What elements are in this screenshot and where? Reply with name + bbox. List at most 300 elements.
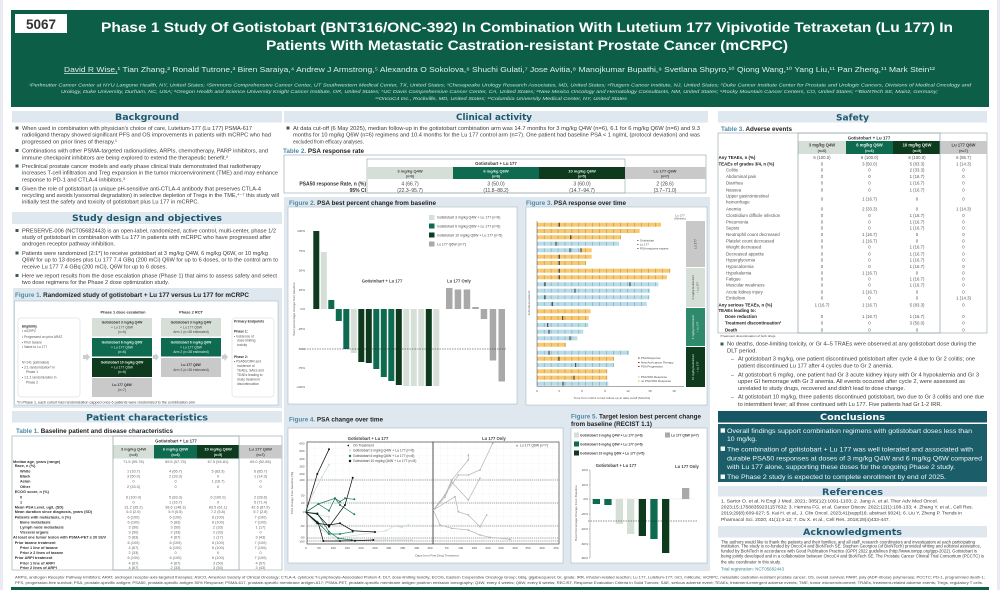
table 1 baseline characteristics (12, 436, 282, 570)
table 3 adverse events: 0 (962, 321, 965, 326)
table 2 PSA response: Lu 177 Q6W (654, 168, 677, 174)
figure 5 legend: Gotistobart 6 mg/kg Q6W + Lu 177 (n=6) (580, 442, 643, 446)
table 3 adverse events: 3 (50.0) (910, 321, 925, 326)
figure 3 legend: treatments: Lu 177 (640, 242, 649, 246)
table 3 adverse events: 0 (962, 226, 965, 231)
table 1 baseline characteristics: 0 (174, 551, 177, 555)
table 3 adverse events: 6 (100.0) (813, 155, 831, 160)
figure 4 axes: PSA change from baseline (%) (290, 472, 294, 514)
figure 4 axes: 200 (299, 472, 305, 476)
heading: clinical activity: Clinical activity (456, 113, 532, 123)
table 1 baseline characteristics: Prior ≥ 2 lines of taxane (20, 551, 63, 555)
figure 3 axes: 12 (626, 389, 630, 393)
table 3 adverse events: Diarrhea (726, 180, 743, 185)
table 3 adverse events: 0 (962, 174, 965, 179)
affiliations: Urology, Duke University, Durham, NC, USA; ⁶Oregon Health and Science University Knight Cancer Institute, OR, United States; ⁷UC Davis Comprehensive Cancer Center, CA, United States; ⁸New Mexico Oncology and Hematology Consultants, NM, United States; ⁹Rocky Mountain Cancer Centers, CO, United States; ¹⁰BioNTech SE, Mainz, Germany; (61, 89, 939, 94)
figure 4 axes: 400 (299, 457, 305, 461)
figure 3 cohort bands: + Lu 177 (696, 361, 700, 372)
heading: background: Background (115, 113, 179, 123)
table 1 baseline characteristics: 67.5 (54-81) (208, 460, 229, 464)
table 3 adverse events: Platelet count decreased (726, 238, 775, 243)
table 3 adverse events: Death (725, 327, 738, 332)
safety bullets: – (731, 373, 734, 379)
table 1 baseline characteristics: (n=5) (214, 453, 222, 457)
clinical activity text: excluded from efficacy analyses. (293, 139, 364, 145)
table 1 baseline characteristics: 2 (33) (171, 566, 181, 570)
table 1 baseline characteristics: 3 (50) (171, 526, 181, 530)
table 1 baseline characteristics: 2 (33.3) (169, 475, 183, 479)
phase 1 dose escalation column (92, 310, 152, 397)
figure 5 axes: -20% (581, 512, 588, 516)
figure 4 axes: 20 (301, 501, 305, 505)
table 1 baseline characteristics: (n=7) (256, 453, 265, 457)
figure 4 spider lines: 10 mg/kg (306, 449, 375, 541)
figure 2 y axis: Best percentage change from baseline (292, 282, 296, 335)
table 3 adverse events: Any TEAEs, n (%) (718, 155, 756, 160)
table 3 adverse events: 0 (821, 162, 824, 167)
figure 2 title: Figure 2. PSA best percent change from baseline (289, 200, 436, 207)
table 3 adverse events: 1 (16.7) (910, 264, 925, 269)
figure 4 axes: 450 (427, 546, 433, 550)
table 1 baseline characteristics: 5 (83.3) (169, 495, 183, 499)
table 3 adverse events: 1 (16.7) (862, 302, 877, 307)
table 3 adverse events: 1 (16.7) (862, 290, 877, 295)
figure 5 group labels: Gotistobart + Lu 177 (596, 463, 637, 468)
table 3 adverse events: 0 (962, 245, 965, 250)
table 1 baseline characteristics: 3 (50) (129, 531, 139, 535)
figure 4 legend: On Treatment (353, 444, 374, 448)
table 3 adverse events: 3 mg/kg Q4W (809, 142, 835, 148)
eligibility box: • Naive to Lu 177 (22, 345, 47, 349)
header banner (11, 10, 989, 107)
table 3 adverse events: 1 (16.7) (862, 197, 877, 202)
background bullets: Combinations with other PSMA-targeted radionuclides, ARPIs, chemotherapy, PARP inhibitors, and (22, 148, 268, 154)
figure 4 axes: 100 (458, 546, 464, 550)
eligibility box: • 2:1 randomization* in (22, 366, 55, 370)
table 3 adverse events: TEAEs of grades 3/4, n (%) (718, 162, 775, 167)
background bullets: Given the role of gotistobart (a unique pH-sensitive anti-CTLA-4 antibody that preserves CTLA-4 (22, 186, 261, 192)
background bullets: Preclinical prostate cancer models and early phase clinical trials demonstrated that radiotherapy (22, 164, 261, 170)
table 1 baseline characteristics: 1 (17) (213, 536, 224, 540)
figure 3 axes: 3 (558, 389, 560, 393)
figure 2 y axis: 50% (299, 268, 305, 272)
figure 4 axes: 50 (445, 546, 449, 550)
table 2 PSA response: PSA50 response Rate, n (%) (299, 181, 366, 187)
phase 1 dose escalation column: + Lu 177 Q6W (111, 346, 134, 350)
table 3 adverse events: 1 (16.7) (910, 251, 925, 256)
table 1 baseline characteristics: 4 (67) (171, 561, 181, 565)
conclusions text: The Phase 2 study is expected to complete enrollment by end of 2025. (727, 474, 946, 481)
safety bullets: upper GI hemorrage with Gr 3 anemia. All events occurred after cycle 2, were assessed as (738, 379, 965, 385)
primary endpoints box: toxicity (237, 343, 247, 347)
phase 2 RCT column: Gotistobart 6 mg/kg Q6W (171, 340, 212, 344)
table 1 baseline characteristics: (n=6) (171, 453, 180, 457)
figure 3 axes: 18 (672, 389, 676, 393)
figure 5 target lesion best percent change: from baseline (RECIST 1.1) (571, 421, 652, 428)
figure 4 spider lines: Lu 177 (433, 443, 510, 539)
eligibility box (18, 318, 80, 397)
table 3 adverse events: 0 (868, 213, 871, 218)
table 3 footnote: ¹Treatment discontinuation of both drugs (720, 334, 776, 338)
figure 5 axes: 20% (582, 483, 588, 487)
table 3 adverse events: Hyperglycemia (726, 258, 756, 263)
table 1 baseline characteristics: 6 (100) (169, 556, 182, 560)
figure 3 cohort bands: + Lu 177 (696, 321, 700, 332)
figure 4 axes: 200 (358, 546, 364, 550)
table 1 baseline characteristics: 5 (71.4) (254, 500, 268, 504)
figure 2 legend: Gotistobart 10 mg/kg Q6W + Lu 177 (n=5) (437, 234, 502, 238)
table 3 adverse events: 0 (962, 290, 965, 295)
table 3 adverse events: 0 (962, 314, 965, 319)
primary endpoints box: TEAEs, SAEs and (237, 369, 264, 373)
table 3 adverse events: 0 (868, 283, 871, 288)
table 3 adverse events: 0 (962, 270, 965, 275)
safety bullets: At gotistobart 6 mg/kg, one patient had Gr 3 acute kidney injury with Gr 4 hypokalemia and Gr 3 (738, 373, 979, 379)
table 1 baseline characteristics: 0 (217, 475, 219, 479)
panel: conclusions (718, 411, 987, 482)
table 3 adverse events: 0 (868, 295, 871, 300)
figure 3 axes: 0 (536, 389, 538, 393)
phase 1 dose escalation column: Gotistobart 3 mg/kg Q4W (102, 320, 143, 324)
figure 2 legend: Lu 177 Q6W (n=7) (437, 242, 466, 246)
table 1 baseline characteristics: 2 (33) (213, 526, 224, 530)
arrow: eligibility to phase 1 (83, 353, 90, 361)
figure 4 axes: 250 (372, 546, 378, 550)
phase 2 RCT column: Arm 3 (n=38 estimated) (173, 368, 209, 372)
table 1 baseline characteristics: 6 (100) (127, 556, 140, 560)
table 3 adverse events: 0 (821, 174, 824, 179)
heading: conclusions (718, 411, 987, 423)
title: Phase 1 Study Of Gotistobart (BNT316/ONC-392) In Combination With Lutetium 177 Vipivotide Tetraxetan (Lu 177) In (101, 20, 953, 36)
figure 3 cohort bands (686, 221, 705, 387)
safety bullets: – (731, 395, 734, 401)
table 3 adverse events: Embolism (726, 295, 746, 300)
figure 4 legend: Lu 177 Q6W (n=7) (520, 444, 548, 448)
figure 4 axes: 0 (305, 546, 307, 550)
table 1 baseline characteristics: 2 (33) (213, 531, 224, 535)
figure 4 spider lines: 3 mg/kg (306, 465, 412, 540)
table 1 baseline characteristics: 6 (100.0) (126, 495, 142, 499)
references text: 1. Sartor O. et al. N Engl J Med. 2021; 385(12):1091-1103; 2. Jang A. et al. Ther Adv Med Oncol. (721, 498, 938, 504)
figure 2 group labels: Gotistobart + Lu 177 (362, 278, 403, 284)
figure 3 cohort bands: + Lu 177 (696, 282, 700, 293)
figure 2 y axis (292, 229, 305, 389)
figure 5 group labels (596, 463, 700, 469)
figure 4 axes: 250 (498, 546, 504, 550)
table 1 baseline characteristics: 0 (259, 551, 262, 555)
figure 4 axes: 300 (386, 546, 392, 550)
arrow: phase 2 to endpoints (222, 353, 228, 361)
figure 4 legend: Gotistobart 10 mg/kg Q6W + Lu 177 (n=5) (353, 459, 416, 463)
clinical activity text (286, 126, 700, 145)
phase 2 RCT column (161, 310, 221, 377)
table 1 baseline characteristics: 7 (100) (254, 541, 267, 545)
figure 3 legend: events: PSA Progression (641, 364, 663, 368)
study design bullets: androgen receptor pathway inhibition. (22, 242, 115, 248)
table 3 adverse events: 0 (821, 220, 824, 225)
table 3 adverse events: 0 (868, 258, 871, 263)
table 1 baseline characteristics: 0 (259, 531, 262, 535)
table 3 adverse events: Gotistobart + Lu 177 (848, 136, 891, 140)
panel: references (718, 486, 987, 522)
clinical activity text: months for 10 mg/kg Q6W (n=6) regimens and 10.4 months for the Lu 177 control arm (n=7). One patient had baseline PSA < 1 ng/mL (protocol deviation) and was (293, 133, 700, 139)
figure 1 footnote: *In Phase 1, each cohort had randomization capped once 6 patients were randomized to the combination arm (17, 400, 195, 404)
figure 3 axes: 6 (581, 389, 583, 393)
safety bullets: to intermittent fever; all three continued with Lu 177. Five patients had Gr 1-2 IRR. (738, 402, 942, 408)
figure 4 axes: 50 (317, 546, 321, 550)
figure 4 spider lines: 6 mg/kg (306, 498, 354, 540)
figure 5 legend: Gotistobart 3 mg/kg Q4W + Lu 177 (n=6) (580, 433, 643, 437)
table 1 baseline characteristics: 0 (217, 551, 219, 555)
table 1 baseline characteristics: 6 (100.0) (210, 495, 226, 499)
panel: figure 1 study schema (13, 288, 282, 408)
phase 2 RCT column: Gotistobart 3 mg/kg Q4W (171, 320, 212, 324)
figure 4 axes: 300 (299, 465, 305, 469)
figure 5 legend: Lu 177 Q6W (n=7) (671, 433, 699, 437)
heading: clinical activity (284, 111, 708, 123)
table 1 baseline characteristics: 7 (100) (254, 546, 267, 550)
figure 2 y axis: 75% (299, 249, 305, 253)
panel: acknowledgments (718, 526, 987, 571)
table 3 adverse events: 6 mg/kg Q6W (856, 142, 883, 148)
figure 4 axes: -50 (300, 524, 305, 528)
table 3 adverse events: 1 (16.7) (910, 277, 925, 282)
study design bullets: Q6W for up to 13 doses plus Lu 177 7.4 GBq (200 mCi) Q6W for up to 6 doses, or to the control arm to (22, 258, 278, 264)
background bullets: response to PD-1 and CTLA-4 inhibitors.³ (22, 177, 125, 183)
table 1 baseline characteristics: 4 (57) (256, 561, 266, 565)
table 1 baseline characteristics: 1 (16.7) (169, 500, 183, 504)
primary endpoints box: TEAEs leading to (237, 373, 263, 377)
table 3 adverse events: 0 (962, 187, 965, 192)
table 3 adverse events: 0 (916, 197, 919, 202)
table 1 baseline characteristics: 42.6 (87.9) (251, 505, 270, 509)
figure 3 title: Figure 3. PSA response over time (526, 200, 626, 207)
figure 3 legend: events: no PSA 50% Response (641, 379, 671, 383)
table 3 adverse events: 1 (16.7) (862, 238, 877, 243)
study design bullets (16, 228, 278, 286)
table 3 adverse events: 6 (100.0) (861, 155, 879, 160)
table 1 baseline characteristics: Patients with metastasis, n (%) (15, 515, 72, 519)
table 1 baseline characteristics: 3 (43) (256, 536, 266, 540)
abbreviations footnote: ARPIs, androgen Receptor Pathway Inhibitors; ARAT, androgen receptor-axis-targeted therapies; ASCO, American Society of Clinical Oncology; CTLA-4, cytotoxic T-Lymphocyte-Associated Protein 4; DLT, dose-limiting toxicity; ECOG, Eastern Cooperative Oncology Group; GBq, gigabecquerel; Gr, grade; IRR, infusion-related reaction; Lu 177, Lutetium-177; mCi, millicurie; mCRPC, metastatic castration-resistant prostate cancer; OS, overall survival; PARP, poly (ADP-ribose) polymerase; PCCTC; PD-1, programmed death-1; (15, 574, 985, 579)
primary endpoints box: incidence of (237, 364, 255, 368)
table 1 baseline characteristics: 6 (100) (169, 546, 182, 550)
figure 2 y axis: -50% (298, 347, 305, 351)
conclusions text: durable PSA50 responses at doses of 3 mg/kg Q4W and 6 mg/kg Q6W compared (727, 455, 982, 462)
background bullets: immune checkpoint inhibitors are being explored to extend the therapeutic benefit.² (22, 155, 228, 161)
table 3 adverse events: Weight decreased (726, 245, 762, 250)
figure 4 group labels: Lu 177 Only (482, 436, 507, 441)
table 3 adverse events: 0 (962, 232, 965, 237)
figure 3 axes: 15 (648, 389, 652, 393)
table 3 adverse events (718, 133, 987, 333)
table 1 baseline characteristics: 6 (100) (169, 541, 182, 545)
table 1 baseline characteristics: 4 (67) (171, 536, 181, 540)
table 3 adverse events: 0 (916, 290, 919, 295)
table 1 baseline characteristics: 4 (67) (129, 561, 139, 565)
table 3 adverse events: Decreased appetite (726, 251, 765, 256)
figure 4 group labels (348, 436, 507, 441)
table 3 adverse events: 1 (16.7) (910, 213, 925, 218)
references text (721, 498, 973, 522)
study design bullets: Patients were randomized (2:1*) to receive gotistobart at 3 mg/kg Q4W, 6 mg/kg Q6W, or 10 mg/kg (22, 251, 268, 257)
background bullets: recycling and avoids lysosomal degradation) in selective depletion of Tregs in the TME,⁴⁻⁷ this study will (22, 193, 279, 199)
figure 4 legend: Gotistobart 3 mg/kg Q4W + Lu 177 (n=6) (353, 449, 414, 453)
table 2 PSA response: 6 mg/kg Q6W (483, 168, 509, 174)
table 3 adverse events: 0 (962, 238, 965, 243)
table 2 PSA response: (14.7–94.7) (569, 188, 595, 194)
table 3 adverse events: 0 (821, 187, 824, 192)
figure 5 axes: Best Percentage Change From Baseline (574, 485, 578, 541)
table 3 adverse events: 0 (962, 327, 965, 332)
figure 4 axes: 0 (303, 510, 305, 514)
phase 1 dose escalation column: Lu 177 Q6W (112, 383, 132, 387)
primary endpoints box: Phase 1: (234, 329, 248, 333)
table 3 adverse events: 2 (33.3) (910, 168, 925, 173)
table 2 PSA response: (n=7) (661, 174, 669, 178)
abbreviations footnote: PFS, progression-free survival; PSA, prostate-specific antigen; PSA50, prostate-specific antigen 50% Response; PSMA-617, prostate-specific membrane antigen-617; PSMA-PET, prostate-specific membrane antigen positron emission tomography; Q4W, every 4 weeks; Q6W, every 6 weeks; RECIST, Response Evaluation Criteria in Solid Tumors; SAE, serious adverse event; TEAEs, treatment-emergent adverse events; TME, tumor microenvironment; TRAEs, treatment-related adverse events; Tregs, regulatory T cells. (15, 580, 983, 585)
background bullets: initially test the safety and toxicity of gotistobart plus Lu 177 in mCRPC. (22, 199, 199, 205)
table 1 baseline characteristics: 31.2 (35.2) (124, 505, 143, 509)
table 3 adverse events: 0 (962, 213, 965, 218)
panel: safety (718, 111, 987, 408)
table 1 baseline characteristics: (n=6) (129, 453, 138, 457)
table 3 adverse events: 0 (868, 245, 871, 250)
table 1 baseline characteristics: 2 (33) (129, 551, 139, 555)
figure 3 cohort bands: 3 mg/kg Gotistobart (691, 275, 695, 300)
table 1 baseline characteristics: Black (20, 475, 31, 479)
table 3 adverse events: 1 (16.7) (910, 220, 925, 225)
table 1 baseline characteristics: Asian (20, 480, 31, 484)
poster number: 5067 (26, 17, 56, 32)
table 1 baseline characteristics: 7 (100) (254, 520, 267, 524)
table 1 baseline characteristics: 3 (50) (129, 526, 139, 530)
table 1 baseline characteristics: 10 mg/kg Q6W (204, 446, 232, 452)
table 2 PSA response: 95% CI (350, 188, 367, 194)
conclusions text: 10 mg/kg. (727, 436, 757, 443)
study design bullets: receive Lu 177 7.4 GBq (200 mCi), Q6W for up to 6 doses. (22, 264, 167, 270)
table 3 adverse events: 0 (821, 251, 824, 256)
background bullets: When used in combination with physician's choice of care, Lutetium-177 (Lu 177) PSMA-617 (22, 126, 252, 132)
table 3 adverse events: 0 (962, 197, 965, 202)
figure 5 target lesion best percent change (571, 414, 707, 563)
figure 4 legend (347, 444, 548, 463)
conclusions text: Overall findings support combination regimens with gotistobart doses less than (727, 428, 972, 435)
table 3 adverse events: 0 (868, 220, 871, 225)
table 3 adverse events: 1 (16.7) (910, 283, 925, 288)
table 2 PSA response: (n=6) (406, 174, 414, 178)
table 3 adverse events: 0 (868, 277, 871, 282)
table 1 baseline characteristics: 5 (83) (129, 536, 139, 540)
table 1 baseline characteristics: 3 (50.0) (127, 475, 141, 479)
table 3 adverse events: 0 (821, 180, 824, 185)
table 1 baseline characteristics: Prior 2 lines of ARPI (20, 566, 57, 570)
eligibility box: • mCRPC (22, 329, 37, 333)
table 1 baseline characteristics: 6 (85.7) (254, 469, 268, 473)
table 3 adverse events: 0 (821, 207, 824, 212)
background bullets (16, 126, 279, 205)
primary endpoints box: study treatment (237, 378, 260, 382)
table 3 adverse events: 0 (962, 258, 965, 263)
table 3 adverse events: Lu 177 Q6W (952, 142, 976, 148)
table 3 adverse events: 0 (821, 238, 824, 243)
table 3 adverse events: 5 (83.3) (910, 302, 925, 307)
table 1 baseline characteristics: Prior ARPI treatment (15, 556, 53, 560)
acknowledgments text (721, 539, 984, 564)
table 1 baseline characteristics: 2 (33.3) (127, 485, 141, 489)
table 1 baseline characteristics: 0 (174, 485, 177, 489)
phase 2 RCT column: + Lu 177 Q6W (180, 346, 203, 350)
table 1 baseline characteristics: Mean PSA Level, ug/L (SD) (15, 505, 64, 509)
table 3 adverse events: 0 (962, 264, 965, 269)
table 3 adverse events: 10 mg/kg Q6W (903, 142, 931, 148)
table 3 adverse events: 0 (821, 327, 824, 332)
figure 3 axes: Time from C1D1 to last follow-up at data cutoff (Months) (574, 396, 650, 400)
figure 3 cohort bands: 6 mg/kg Gotistobart (691, 315, 695, 339)
table 3 adverse events: 0 (821, 226, 824, 231)
figure 5 axes: -60% (581, 542, 588, 546)
table 3 adverse events: 0 (821, 213, 824, 218)
panel: patient characteristics (12, 411, 282, 570)
arrow: phase 1 to phase 2 (153, 353, 159, 361)
clinical activity text: At data cut-off (6 May 2025), median follow-up in the gotistobart combination arm was 14.7 months for 3 mg/kg Q4W (n=6), 6.1 for 6 mg/kg Q6W (n=6) and 9.3 (293, 126, 700, 132)
figure 5 legend: Gotistobart 10 mg/kg Q6W + Lu 177 (n=5) (580, 451, 644, 455)
study design bullets: study of gotistobart in combination with Lu 177 in patients with mCRPC who have progressed after (22, 235, 271, 241)
table 3 adverse events: 6 (85.7) (956, 155, 971, 160)
table 3 adverse events: 0 (962, 168, 965, 173)
table 3 adverse events: 0 (962, 302, 965, 307)
eligibility box: Phase 1 (26, 370, 38, 374)
figure 4 axes: 400 (539, 546, 545, 550)
table 1 baseline characteristics: 6 mg/kg Q6W (163, 446, 188, 452)
table 3 adverse events: 0 (962, 180, 965, 185)
table 1 baseline characteristics: Lu 177 Q6W (249, 446, 272, 452)
table 3 adverse events: 1 (16.7) (910, 258, 925, 263)
phase 2 RCT column: Lu 177 Q6W (181, 363, 201, 367)
title: Patients With Metastatic Castration-resistant Prostate Cancer (mCRPC) (266, 38, 788, 54)
figure 4 axes: -100 (298, 540, 305, 544)
figure 4 axes: -90 (300, 536, 305, 540)
table 1 baseline characteristics: 0 (259, 480, 262, 484)
table 3 adverse events: 0 (916, 232, 919, 237)
footer bar (11, 587, 989, 590)
affiliations: ¹¹OncoC4 Inc., Rockville, MD, United States; ¹²Columbia University Medical Center, NY, United States (375, 96, 628, 101)
table 3 adverse events: Sepsis (726, 226, 740, 231)
table 3 adverse events: 0 (821, 295, 824, 300)
figure 5 axes: -80% (581, 556, 588, 560)
table 3 adverse events: 0 (821, 245, 824, 250)
table 3 adverse events: 0 (821, 277, 824, 282)
table 1 baseline characteristics: Prior 1 line of taxane (20, 546, 58, 550)
study design bullets: PRESERVE-006 (NCT05682443) is an open-label, randomized, active control, multi-center, phase 1/2 (22, 228, 276, 234)
table 1 baseline characteristics: ECOG score, n (%) (15, 490, 50, 494)
table 3 adverse events: 1 (16.7) (910, 314, 925, 319)
figure 2 group labels (362, 278, 472, 284)
safety bullets: unrelated to study drugs, recovered and didn't lead to dose change. (738, 386, 905, 392)
table 1 baseline characteristics: Race, n (%) (15, 464, 36, 468)
figure 4 axes: 400 (414, 546, 420, 550)
figure 3 axes (527, 214, 686, 400)
table 1 baseline characteristics: At least one tumor lesion with PSMA-PET ≥ 20 SUV (13, 536, 107, 540)
primary endpoints box: • Incidence of (234, 334, 254, 338)
figure 3 swimmer bars (537, 223, 670, 386)
figure 2 y axis: 100% (297, 229, 305, 233)
figure 2 group labels: Lu 177 Only (447, 278, 472, 284)
table 3 adverse events: 0 (916, 295, 919, 300)
table 1 baseline characteristics: Bone metastasis (20, 520, 51, 524)
heading: safety: Safety (836, 114, 869, 124)
table 1 baseline characteristics: 6 (100) (212, 546, 225, 550)
